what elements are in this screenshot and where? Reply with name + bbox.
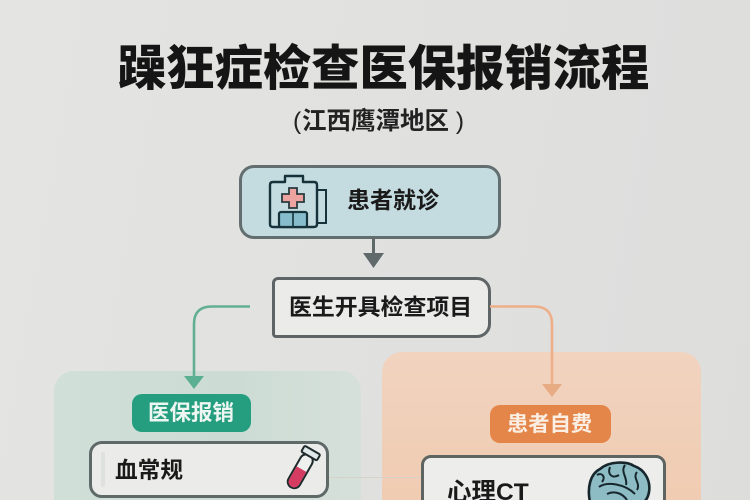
panel: medical insurance reimbursement [54, 371, 361, 500]
subtitle: ( [293, 108, 301, 135]
icon: hospital [268, 174, 327, 228]
subtitle: 江西鹰潭地区 [302, 108, 449, 135]
badge: medical insurance [132, 394, 251, 432]
icon: test tube [286, 445, 321, 490]
connector between cards [328, 477, 421, 478]
badge label: medical insurance: 医保报销 [148, 401, 234, 425]
title: 躁狂症检查医保报销流程 [118, 42, 649, 96]
arrow: visit to prescription [363, 239, 384, 268]
badge label: self-pay: 患者自费 [507, 412, 592, 436]
decorative bar [101, 452, 105, 487]
label: blood routine: 血常规 [115, 457, 183, 483]
subtitle: ) [456, 108, 464, 135]
icon: brain [588, 461, 651, 500]
card: blood routine [89, 441, 329, 498]
badge: self-pay [490, 405, 611, 443]
arrow: green branch [184, 305, 250, 389]
card: doctor prescribes tests [272, 277, 491, 338]
arrow: orange branch [490, 305, 562, 397]
card: psychological CT [421, 455, 666, 500]
label: patient visit: 患者就诊 [347, 187, 439, 213]
card: patient visit [239, 165, 501, 239]
label: doctor prescribes tests: 医生开具检查项目 [289, 294, 472, 320]
panel: patient self-pay [382, 352, 701, 500]
